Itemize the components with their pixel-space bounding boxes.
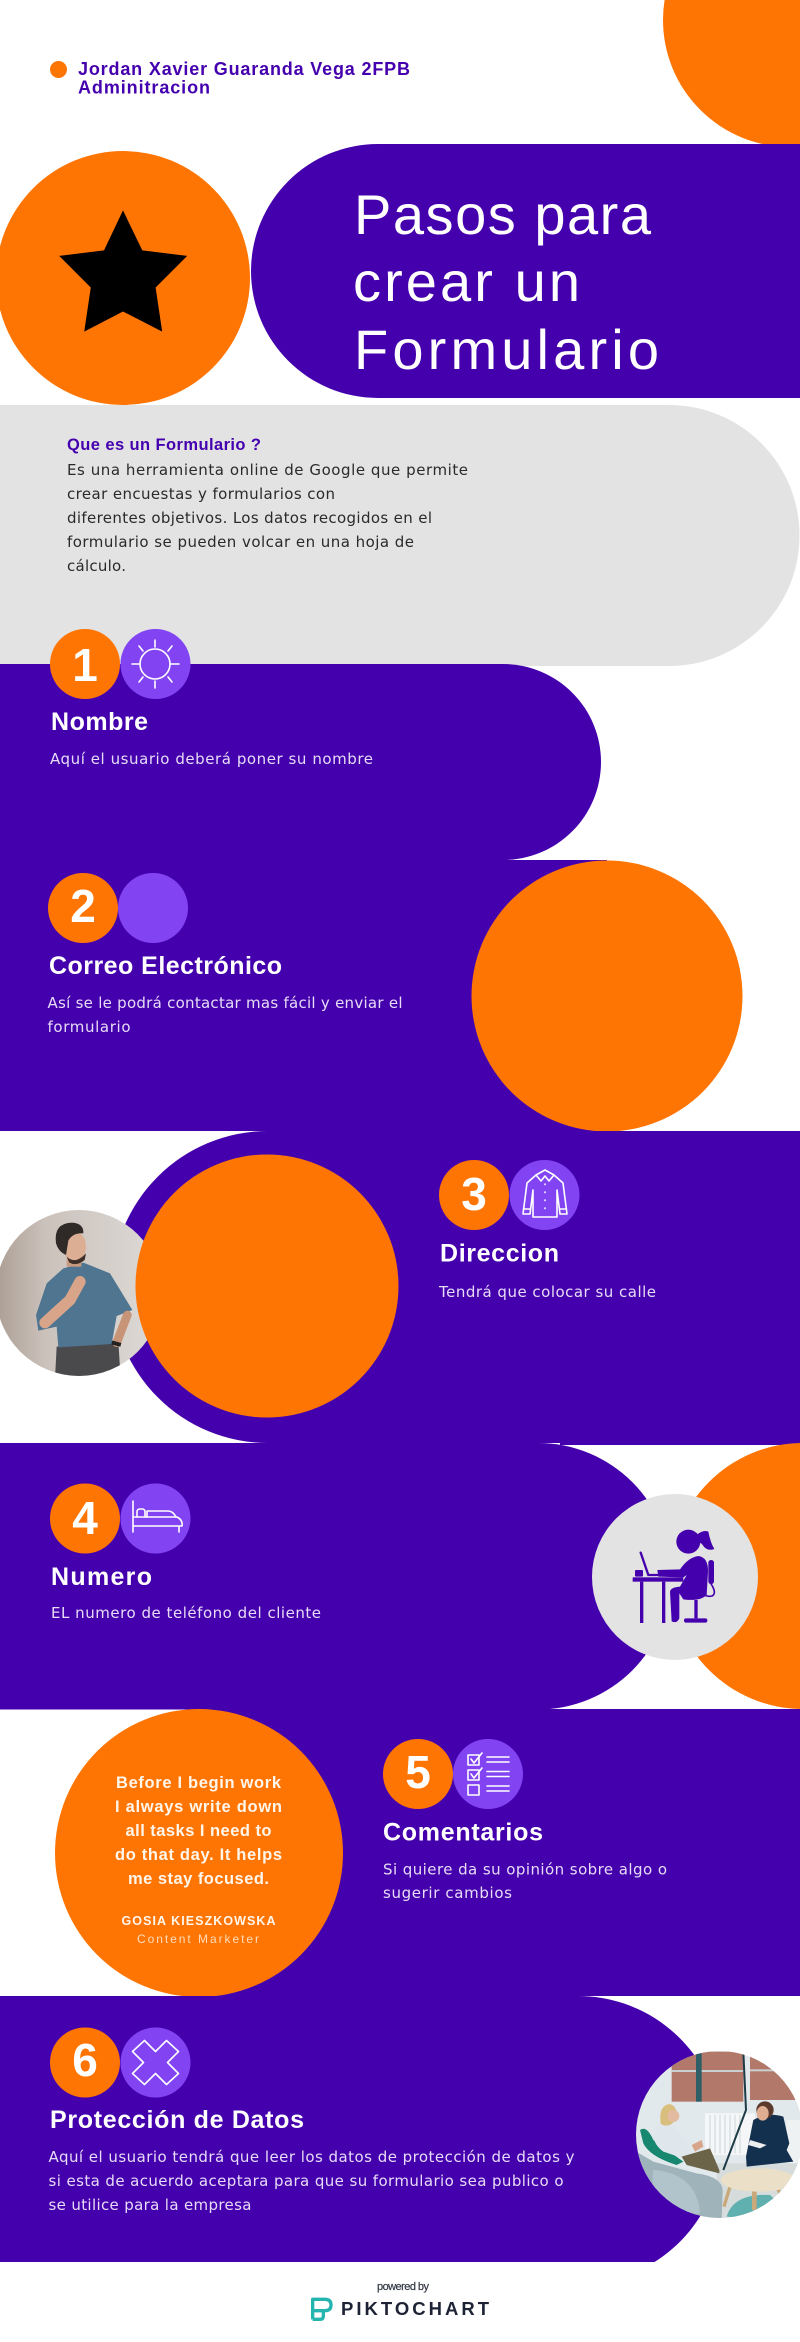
icon: shirt (523, 1170, 567, 1217)
title panel: Formulario (354, 318, 659, 381)
panel: step 6 proteccion de datos: Protección de Datos (50, 2106, 304, 2134)
icon: piktochart logo (313, 2299, 331, 2319)
panel: que es un formulario: Es una herramienta online de Google que permite (67, 461, 468, 479)
panel: step 1 nombre (0, 629, 601, 860)
panel: step 2 correo electronico: Así se le podrá contactar mas fácil y enviar el (48, 994, 402, 1012)
panel: step 5 comentarios: sugerir cambios (383, 1884, 512, 1902)
panel: step 5 comentarios: Si quiere da su opinión sobre algo o (383, 1860, 667, 1878)
author header: Adminitracion (78, 78, 210, 98)
panel: step 5 comentarios: Comentarios (383, 1818, 543, 1846)
panel: step 3 direccion: Direccion (440, 1240, 559, 1268)
panel: step 4 numero: Numero (51, 1563, 152, 1591)
panel: step 2 correo electronico: formulario (48, 1018, 130, 1036)
title panel: crear un (353, 250, 580, 313)
author header: Jordan Xavier Guaranda Vega 2FPB (78, 59, 410, 79)
panel: step 3 direccion: 3 (461, 1168, 487, 1220)
title panel: Pasos para (354, 183, 652, 246)
panel: step 4 numero (0, 1443, 800, 1710)
panel: step 6 proteccion de datos: Aquí el usuario tendrá que leer los datos de protección de datos y (48, 2148, 575, 2166)
title panel (251, 144, 800, 398)
footer: piktochart credit (313, 2281, 490, 2319)
quote circle: Before I begin work (116, 1774, 282, 1792)
decorative orange circle top right (663, 0, 800, 147)
panel: que es un formulario: crear encuestas y formularios con (67, 485, 335, 503)
icon: cross (132, 2040, 178, 2084)
icon: sun (132, 640, 179, 688)
panel: step 6 proteccion de datos: 6 (72, 2034, 98, 2086)
panel: step 6 proteccion de datos (0, 1996, 800, 2262)
panel: step 3 direccion (0, 1131, 800, 1445)
panel: step 2 correo electronico: 2 (70, 880, 96, 932)
quote circle (55, 1709, 343, 1997)
quote circle: Content Marketer (137, 1932, 259, 1946)
panel: que es un formulario: Que es un Formulario ? (67, 436, 261, 454)
quote circle: me stay focused. (128, 1870, 269, 1888)
photo: two women in a meeting (636, 2051, 800, 2218)
quote circle: all tasks I need to (126, 1822, 272, 1840)
icon: checklist (468, 1753, 509, 1795)
panel: step 4 numero: EL numero de teléfono del cliente (51, 1604, 321, 1622)
panel: que es un formulario: cálculo. (67, 557, 126, 575)
panel: step 6 proteccion de datos: si esta de acuerdo aceptara para que su formulario sea publico o (48, 2172, 564, 2190)
panel: que es un formulario (0, 405, 800, 666)
quote circle: do that day. It helps (115, 1846, 282, 1864)
panel: step 1 nombre: Nombre (51, 708, 148, 736)
footer: piktochart credit: PIKTOCHART (341, 2298, 490, 2319)
footer: piktochart credit: powered by (377, 2281, 430, 2293)
panel: step 1 nombre: Aquí el usuario deberá poner su nombre (50, 750, 373, 768)
icon: star in orange circle (0, 151, 250, 405)
quote circle: GOSIA KIESZKOWSKA (122, 1914, 276, 1928)
panel: que es un formulario: diferentes objetivos. Los datos recogidos en el (67, 509, 432, 527)
panel: step 5 comentarios: 5 (405, 1746, 431, 1798)
panel: step 2 correo electronico: Correo Electrónico (49, 952, 282, 980)
panel: que es un formulario: formulario se pueden volcar en una hoja de (67, 533, 414, 551)
panel: step 6 proteccion de datos: se utilice para la empresa (48, 2196, 252, 2214)
author header (50, 59, 410, 98)
panel: step 1 nombre: 1 (72, 639, 98, 691)
icon: bed (133, 1501, 182, 1532)
panel: step 4 numero: 4 (72, 1492, 98, 1544)
quote circle: I always write down (115, 1798, 282, 1816)
photo: man with shirt (0, 1210, 148, 1376)
panel: step 2 correo electronico (0, 860, 742, 1132)
panel: step 3 direccion: Tendrá que colocar su calle (438, 1283, 656, 1301)
icon: woman at desk (633, 1530, 714, 1623)
panel: step 5 comentarios (55, 1709, 800, 1997)
